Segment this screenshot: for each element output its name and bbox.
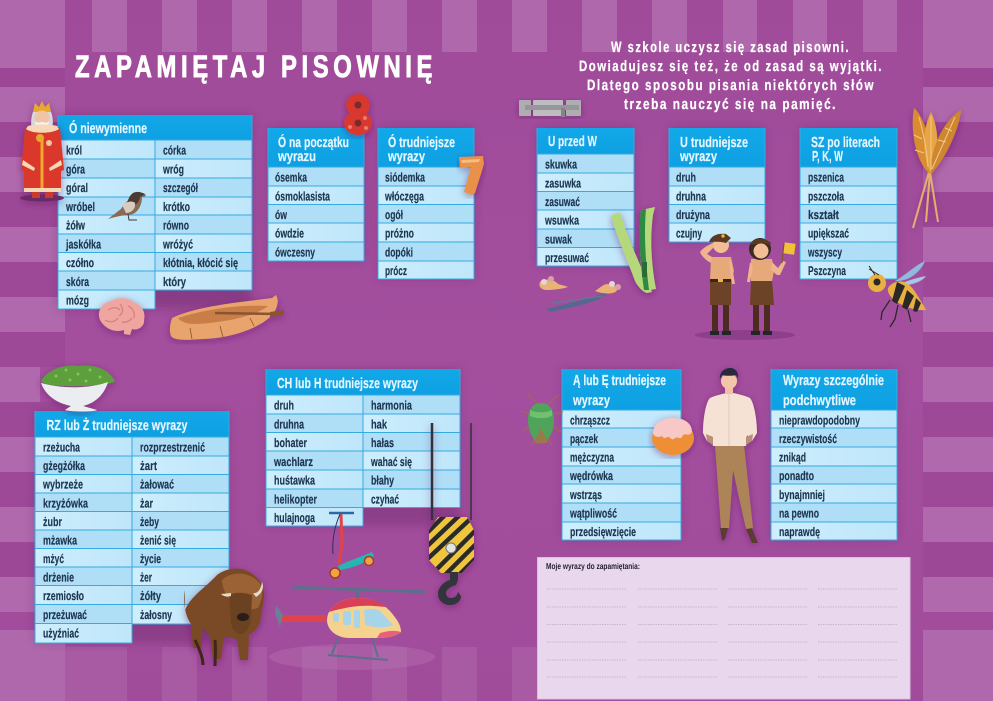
table: Ó na początku wyrazu bbox=[268, 128, 364, 261]
table: CH lub H trudniejsze wyrazy: hulajnoga bbox=[274, 511, 316, 525]
icon: canoe bbox=[170, 295, 284, 340]
table: Ó niewymienne bbox=[58, 115, 252, 309]
icon: doughnut bbox=[652, 418, 694, 455]
table: Ó trudniejsze wyrazy: wyrazy bbox=[387, 149, 425, 165]
table: SZ po literach P, K, W: pszenica bbox=[808, 170, 845, 184]
table: Wyrazy szczególnie podchwytliwe: Wyrazy szczególnie bbox=[783, 373, 884, 389]
intro text: Dowiadujesz się też, że od zasad są wyjątki. bbox=[579, 58, 883, 75]
table: U trudniejsze wyrazy: druhna bbox=[676, 190, 707, 204]
table: RZ lub Ż trudniejsze wyrazy: wybrzeże bbox=[42, 478, 83, 492]
table: Ó na początku wyrazu: ów bbox=[275, 208, 287, 222]
table: Wyrazy szczególnie podchwytliwe bbox=[771, 369, 897, 540]
table: RZ lub Ż trudniejsze wyrazy: żałować bbox=[140, 478, 174, 492]
icon: brain bbox=[99, 298, 145, 335]
table: RZ lub Ż trudniejsze wyrazy: krzyżówka bbox=[43, 496, 89, 510]
table: Ó niewymienne: góral bbox=[66, 181, 88, 195]
icon: number 7 bbox=[459, 156, 484, 195]
table: Ą lub Ę trudniejsze wyrazy: pączek bbox=[570, 432, 598, 446]
table: Ó niewymienne: krótko bbox=[163, 200, 190, 214]
table: Wyrazy szczególnie podchwytliwe: naprawdę bbox=[779, 525, 820, 539]
table: Wyrazy szczególnie podchwytliwe: podchwytliwe bbox=[783, 393, 856, 409]
table: RZ lub Ż trudniejsze wyrazy: żałosny bbox=[140, 608, 172, 622]
table: Ó trudniejsze wyrazy: dopóki bbox=[385, 246, 413, 260]
table: Ó trudniejsze wyrazy: Ó trudniejsze bbox=[388, 134, 455, 151]
table: CH lub H trudniejsze wyrazy: druh bbox=[274, 398, 294, 412]
table: U trudniejsze wyrazy bbox=[669, 128, 765, 242]
table: U trudniejsze wyrazy: drużyna bbox=[676, 208, 711, 222]
dotted writing lines bbox=[547, 589, 898, 677]
table: CH lub H trudniejsze wyrazy: wahać się bbox=[370, 455, 412, 469]
table: SZ po literach P, K, W: kształt bbox=[808, 208, 840, 222]
table: SZ po literach P, K, W: upiększać bbox=[808, 226, 849, 240]
table: U przed W: skuwka bbox=[545, 158, 578, 172]
table: SZ po literach P, K, W: Pszczyna bbox=[808, 264, 847, 278]
table: Ó trudniejsze wyrazy: prócz bbox=[385, 264, 407, 278]
table: SZ po literach P, K, W: P, K, W bbox=[812, 149, 843, 165]
icon: scouts bbox=[695, 234, 796, 340]
table: Ó niewymienne: jaskółka bbox=[65, 238, 102, 252]
table: Ą lub Ę trudniejsze wyrazy: przedsięwzięcie bbox=[570, 525, 636, 539]
icon: wheat bbox=[913, 108, 961, 228]
icon: man bbox=[703, 368, 758, 543]
table: Ó na początku wyrazu: ósmoklasista bbox=[275, 190, 331, 204]
table: Ą lub Ę trudniejsze wyrazy: wyrazy bbox=[572, 393, 610, 409]
table: U przed W: suwak bbox=[545, 232, 572, 246]
table: Ó trudniejsze wyrazy: siódemka bbox=[385, 170, 426, 184]
table: U trudniejsze wyrazy: wyrazy bbox=[679, 149, 717, 165]
table: CH lub H trudniejsze wyrazy: wachlarz bbox=[273, 455, 313, 469]
table: Ó trudniejsze wyrazy: włóczęga bbox=[384, 190, 425, 204]
table: Wyrazy szczególnie podchwytliwe: rzeczywistość bbox=[779, 432, 837, 446]
icon: sparrow bbox=[108, 192, 146, 220]
table: CH lub H trudniejsze wyrazy bbox=[266, 369, 460, 526]
table: Ó niewymienne: który bbox=[163, 275, 186, 289]
intro text: Dlatego sposobu pisania niektórych słów bbox=[587, 77, 875, 94]
table: Ó niewymienne: wróżyć bbox=[162, 238, 193, 252]
table: U przed W: przesuwać bbox=[545, 251, 589, 265]
table: Ó niewymienne: skóra bbox=[66, 275, 90, 289]
intro text bbox=[579, 39, 883, 113]
table: Ó trudniejsze wyrazy bbox=[378, 128, 474, 279]
table: Ó niewymienne: król bbox=[66, 144, 82, 158]
icon: hairpins bbox=[539, 276, 621, 312]
table: Ą lub Ę trudniejsze wyrazy: mężczyzna bbox=[570, 450, 615, 464]
panel: notes bbox=[538, 558, 910, 699]
table: RZ lub Ż trudniejsze wyrazy: gżegżółka bbox=[43, 459, 86, 473]
table: CH lub H trudniejsze wyrazy: błahy bbox=[371, 474, 394, 488]
table: RZ lub Ż trudniejsze wyrazy: RZ lub Ż trudniejsze wyrazy bbox=[46, 417, 188, 434]
table: U przed W: wsuwka bbox=[544, 214, 580, 228]
table: Wyrazy szczególnie podchwytliwe: nieprawdopodobny bbox=[779, 414, 860, 428]
table: RZ lub Ż trudniejsze wyrazy: żenić się bbox=[140, 533, 176, 547]
table: RZ lub Ż trudniejsze wyrazy: mżawka bbox=[43, 533, 78, 547]
table: Ó niewymienne: córka bbox=[163, 144, 187, 158]
table: Ó niewymienne: góra bbox=[66, 162, 86, 176]
icon: bee bbox=[868, 261, 926, 327]
icon: zipper bbox=[611, 207, 656, 293]
table: Ó na początku wyrazu: wyrazu bbox=[277, 149, 316, 165]
table: Ą lub Ę trudniejsze wyrazy: wstrząs bbox=[569, 488, 602, 502]
table: CH lub H trudniejsze wyrazy: hałas bbox=[371, 436, 394, 450]
table: Ą lub Ę trudniejsze wyrazy bbox=[562, 369, 681, 540]
table: RZ lub Ż trudniejsze wyrazy: żart bbox=[140, 459, 158, 473]
table: Ó niewymienne: wróbel bbox=[65, 200, 95, 214]
table: Ó niewymienne: Ó niewymienne bbox=[69, 120, 147, 137]
table: Ó na początku wyrazu: ósemka bbox=[275, 170, 308, 184]
table: Ó niewymienne: wróg bbox=[162, 162, 184, 176]
table: RZ lub Ż trudniejsze wyrazy: rozprzestrzenić bbox=[140, 440, 205, 454]
table: RZ lub Ż trudniejsze wyrazy: żeby bbox=[140, 515, 159, 529]
table: U przed W: U przed W bbox=[548, 134, 597, 150]
table: CH lub H trudniejsze wyrazy: hak bbox=[371, 417, 387, 431]
table: U trudniejsze wyrazy: czujny bbox=[676, 226, 702, 240]
table: U trudniejsze wyrazy: U trudniejsze bbox=[680, 135, 748, 151]
table: RZ lub Ż trudniejsze wyrazy: rzeżucha bbox=[43, 440, 81, 454]
table: U trudniejsze wyrazy: druh bbox=[676, 170, 696, 184]
table: RZ lub Ż trudniejsze wyrazy: przeżuwać bbox=[43, 608, 87, 622]
table: Ą lub Ę trudniejsze wyrazy: Ą lub Ę trudniejsze bbox=[573, 373, 666, 389]
icon: number 8 bbox=[344, 94, 372, 135]
girl scout bbox=[747, 238, 796, 335]
table: Ó na początku wyrazu: Ó na początku bbox=[278, 134, 349, 151]
table: CH lub H trudniejsze wyrazy: czyhać bbox=[371, 492, 399, 506]
table: Ó niewymienne: równo bbox=[163, 218, 189, 232]
table: CH lub H trudniejsze wyrazy: huśtawka bbox=[274, 474, 316, 488]
table: Ą lub Ę trudniejsze wyrazy: wątpliwość bbox=[569, 506, 617, 520]
table: SZ po literach P, K, W: wszyscy bbox=[807, 246, 842, 260]
icon: crane hook bbox=[426, 423, 477, 609]
table: Ó niewymienne: kłótnia, kłócić się bbox=[163, 256, 238, 270]
table: CH lub H trudniejsze wyrazy: CH lub H trudniejsze wyrazy bbox=[277, 376, 418, 392]
icon: scooter bbox=[329, 513, 374, 578]
table: RZ lub Ż trudniejsze wyrazy: żer bbox=[140, 571, 152, 585]
table: Ó na początku wyrazu: ówczesny bbox=[275, 246, 315, 260]
table: Ó na początku wyrazu: ówdzie bbox=[275, 226, 304, 240]
icon: door latch bbox=[519, 100, 581, 117]
table: RZ lub Ż trudniejsze wyrazy: mżyć bbox=[43, 552, 64, 566]
table: RZ lub Ż trudniejsze wyrazy bbox=[35, 411, 229, 643]
table: CH lub H trudniejsze wyrazy: bohater bbox=[274, 436, 307, 450]
table: Ó niewymienne: czółno bbox=[66, 256, 94, 270]
boy scout bbox=[700, 234, 735, 335]
table: Wyrazy szczególnie podchwytliwe: ponadto bbox=[779, 469, 814, 483]
notes heading: Moje wyrazy do zapamiętania: bbox=[546, 561, 640, 571]
table: U przed W: zasuwać bbox=[545, 195, 580, 209]
table: RZ lub Ż trudniejsze wyrazy: drżenie bbox=[43, 571, 74, 585]
table: SZ po literach P, K, W: SZ po literach bbox=[811, 135, 880, 151]
intro text: W szkole uczysz się zasad pisowni. bbox=[611, 39, 850, 56]
table: Ó niewymienne: mózg bbox=[66, 294, 89, 308]
table: SZ po literach P, K, W bbox=[800, 128, 897, 279]
table: U przed W: zasuwka bbox=[545, 176, 582, 190]
icon: bison bbox=[184, 569, 264, 666]
table: CH lub H trudniejsze wyrazy: harmonia bbox=[371, 398, 413, 412]
table: RZ lub Ż trudniejsze wyrazy: życie bbox=[140, 552, 161, 566]
table: Wyrazy szczególnie podchwytliwe: na pewno bbox=[779, 506, 819, 520]
table: RZ lub Ż trudniejsze wyrazy: żar bbox=[140, 496, 153, 510]
table: Ą lub Ę trudniejsze wyrazy: chrząszcz bbox=[570, 414, 610, 428]
table: RZ lub Ż trudniejsze wyrazy: użyźniać bbox=[43, 626, 79, 640]
table: Ą lub Ę trudniejsze wyrazy: wędrówka bbox=[569, 469, 614, 483]
title: ZAPAMIĘTAJ PISOWNIĘ bbox=[75, 49, 437, 84]
table: Wyrazy szczególnie podchwytliwe: znikąd bbox=[779, 450, 806, 464]
table: RZ lub Ż trudniejsze wyrazy: żółty bbox=[140, 589, 161, 603]
table: RZ lub Ż trudniejsze wyrazy: rzemiosło bbox=[43, 589, 84, 603]
icon: green bug bbox=[521, 394, 563, 445]
icon: bowl of cress bbox=[41, 365, 115, 412]
intro text: trzeba nauczyć się na pamięć. bbox=[624, 96, 837, 113]
icon: king bbox=[20, 101, 64, 202]
icon: helicopter bbox=[269, 586, 435, 670]
table: Ó trudniejsze wyrazy: próżno bbox=[385, 226, 414, 240]
table: U przed W bbox=[537, 128, 634, 266]
table: CH lub H trudniejsze wyrazy: helikopter bbox=[274, 492, 317, 506]
table: RZ lub Ż trudniejsze wyrazy: żubr bbox=[43, 515, 62, 529]
table: Ó niewymienne: żółw bbox=[66, 218, 85, 232]
table: SZ po literach P, K, W: pszczoła bbox=[808, 190, 845, 204]
table: CH lub H trudniejsze wyrazy: druhna bbox=[274, 417, 305, 431]
table: Wyrazy szczególnie podchwytliwe: bynajmniej bbox=[779, 488, 825, 502]
table: Ó niewymienne: szczegół bbox=[163, 181, 198, 195]
table: Ó trudniejsze wyrazy: ogół bbox=[385, 208, 403, 222]
